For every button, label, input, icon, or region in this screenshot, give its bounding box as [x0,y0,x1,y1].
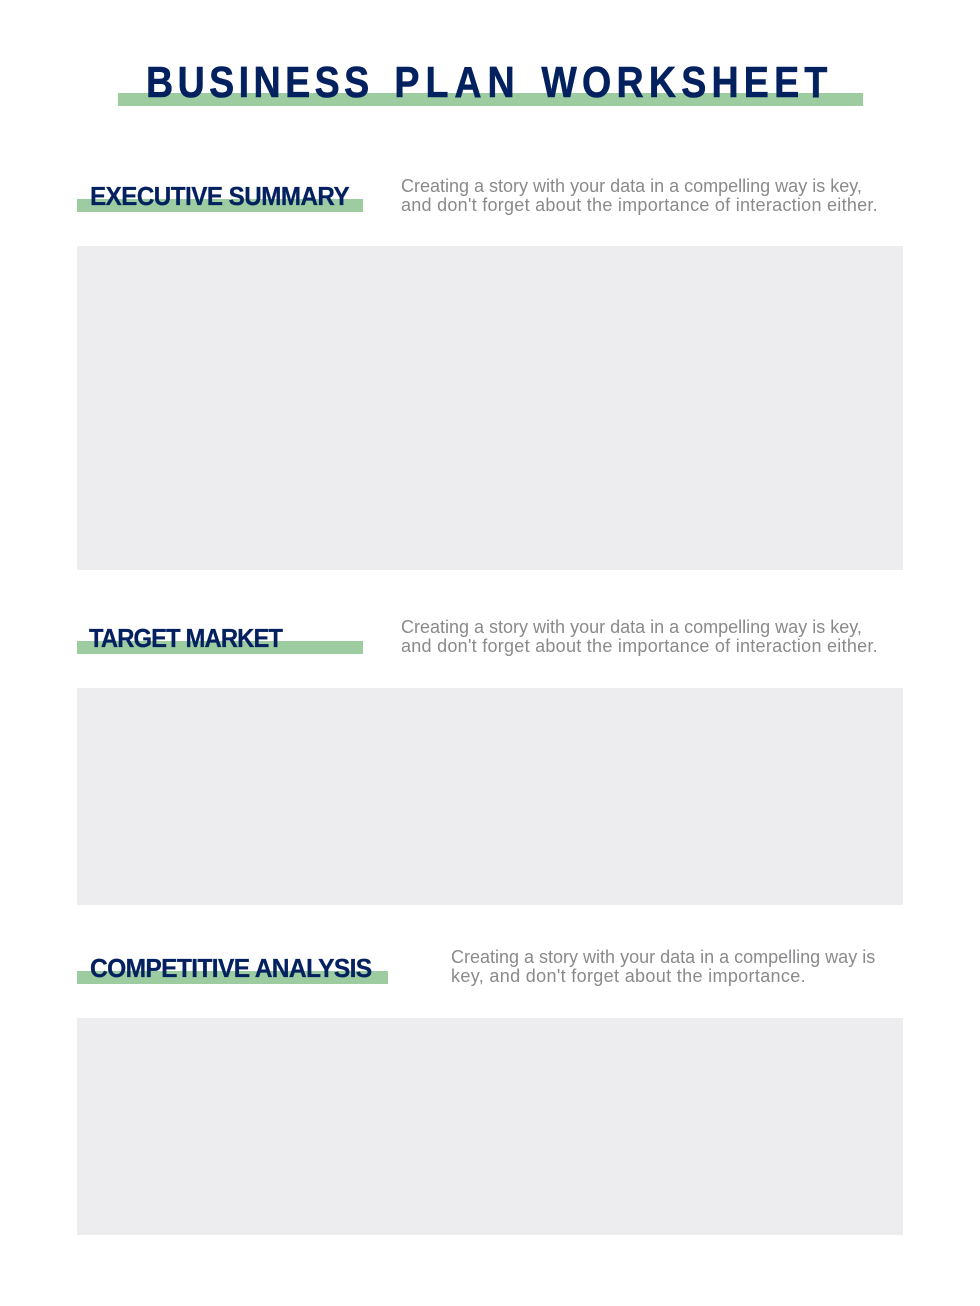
text: executive summary description [401,176,878,215]
text: target market description [401,617,878,656]
text: target market description: Creating a story with your data in a compelling way is key, [401,617,862,637]
text: executive summary description: and don't forget about the importance of interaction either. [401,195,878,215]
title: BUSINESS PLAN WORKSHEET [146,58,833,107]
text: competitive analysis description: Creating a story with your data in a compelling way is [451,947,875,967]
text: competitive analysis description: key, and don't forget about the importance. [451,966,806,986]
heading: target market: TARGET MARKET [89,623,282,653]
heading: competitive analysis: COMPETITIVE ANALYSIS [90,953,372,983]
panel: executive summary [77,246,903,570]
text: target market description: and don't forget about the importance of interaction either. [401,636,878,656]
heading: target market [77,623,363,654]
heading: executive summary: EXECUTIVE SUMMARY [90,181,349,211]
panel: competitive analysis [77,1018,903,1235]
text: competitive analysis description [451,947,875,986]
text: executive summary description: Creating a story with your data in a compelling way is key, [401,176,862,196]
panel: target market [77,688,903,905]
